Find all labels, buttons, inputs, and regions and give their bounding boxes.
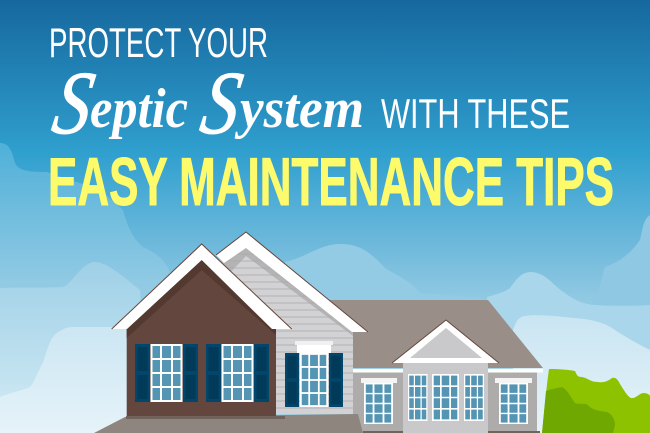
title script: septic system: S [195,53,249,153]
dormer gable [392,320,499,433]
title [47,19,614,220]
title script: septic system: eptic [90,78,188,140]
title script: septic system: S [47,53,101,153]
house [94,232,543,433]
clouds [0,143,650,433]
right wing walls [353,369,543,433]
title line: with these: WITH THESE [381,90,570,137]
left window 2 with shutters [206,344,269,402]
right wing window right [495,378,532,424]
bush [542,369,650,433]
back roof [330,300,543,368]
title line: protect your: PROTECT YOUR [49,19,268,66]
brown gable [112,244,292,419]
right wing window left [361,378,397,424]
bay windows [408,374,484,421]
title script: septic system [47,53,364,153]
title script: septic system: ystem [234,78,364,140]
middle window with shutters [285,341,343,407]
left window 1 with shutters [135,344,198,402]
grey gable [200,232,368,414]
ground and porch [94,414,363,433]
